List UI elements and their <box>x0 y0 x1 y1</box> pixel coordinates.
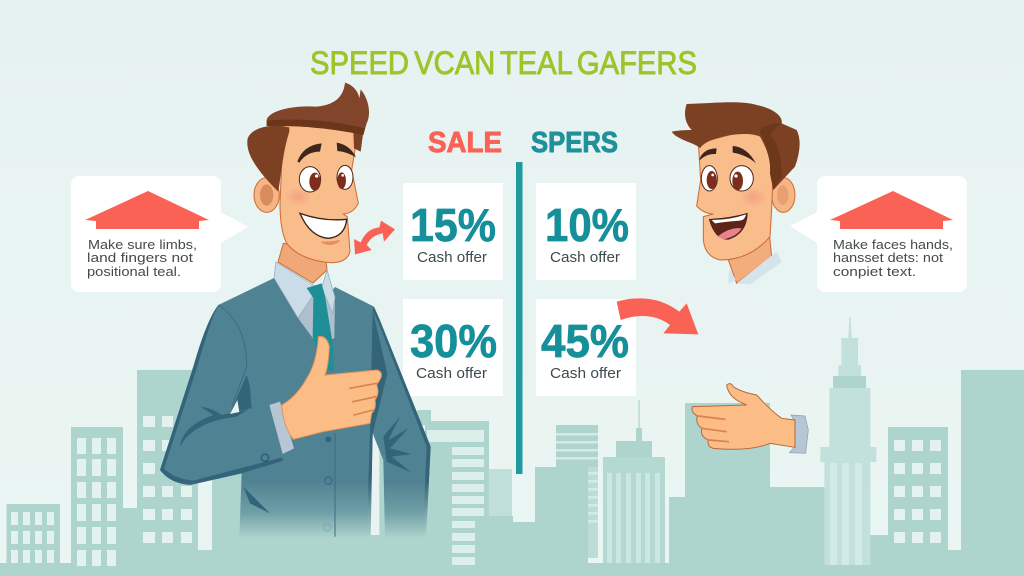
callout text: hansset dets: not <box>833 251 944 265</box>
head <box>247 83 369 263</box>
card: 15% cash offer: Cash offer <box>417 249 487 266</box>
eyebrows <box>699 146 756 163</box>
card: 10% cash offer: 10% <box>545 199 629 251</box>
windows: tall left building <box>77 438 116 566</box>
city skyline <box>0 317 1024 576</box>
eyes <box>701 166 753 191</box>
ear <box>772 178 795 212</box>
card: 45% cash offer: 45% <box>541 315 629 367</box>
face <box>280 123 358 263</box>
smile <box>300 213 347 244</box>
card: 15% cash offer <box>403 183 503 280</box>
heading: spers: SPERS <box>531 127 618 159</box>
tower B <box>820 317 876 565</box>
icon: coral roof arrow <box>85 191 209 229</box>
arrow: large curved coral arrow <box>617 298 698 334</box>
callout: right speech bubble <box>790 176 967 292</box>
arrow: small double-headed coral arrow <box>354 221 395 254</box>
character: right man head <box>672 102 800 285</box>
card: 45% cash offer: Cash offer <box>550 365 621 382</box>
striped tower <box>556 425 598 558</box>
centre divider <box>516 162 522 474</box>
windows: third left building <box>143 416 192 543</box>
cuff <box>789 415 808 453</box>
icon: coral roof arrow <box>830 191 953 229</box>
face <box>697 127 773 260</box>
light column behind jacket <box>198 484 212 550</box>
card: 10% cash offer <box>536 183 636 280</box>
window bars: centre building <box>427 430 484 565</box>
hair <box>247 83 369 192</box>
callout: left speech bubble <box>71 176 248 292</box>
callout text: conpiet text. <box>833 265 916 279</box>
windows: right building <box>894 440 941 543</box>
eyebrows <box>297 143 356 163</box>
open mouth <box>709 213 747 239</box>
callout text <box>833 238 953 279</box>
callout text <box>87 238 197 279</box>
character: pointing hand <box>692 384 808 453</box>
card: 15% cash offer: 15% <box>410 199 496 251</box>
heading: sale: SALE <box>428 127 502 159</box>
eyes <box>299 165 353 192</box>
hand <box>692 384 795 449</box>
ear <box>254 178 279 212</box>
callout text: positional teal. <box>87 265 181 279</box>
card: 30% cash offer: Cash offer <box>416 365 487 382</box>
shirt cuff <box>269 402 294 454</box>
jacket and torso <box>160 243 431 537</box>
callout text: Make sure limbs, <box>88 238 197 252</box>
hair <box>672 102 800 190</box>
card: 30% cash offer <box>403 299 503 396</box>
neck and collar <box>728 223 782 285</box>
tie <box>307 283 334 371</box>
callout text: Make faces hands, <box>833 238 953 252</box>
neck <box>278 243 327 283</box>
thumbs up hand <box>282 336 381 439</box>
callout text: land fingers not <box>87 251 194 265</box>
card: 10% cash offer: Cash offer <box>550 249 620 266</box>
tower A <box>603 400 665 563</box>
character: left man <box>160 83 431 537</box>
pale centre block <box>489 469 512 516</box>
card: 45% cash offer <box>536 299 636 396</box>
shirt and collar <box>298 288 335 343</box>
windows: far-left building <box>11 512 54 563</box>
title: SPEED VCAN TEAL GAFERS <box>310 44 697 81</box>
card: 30% cash offer: 30% <box>410 315 497 367</box>
